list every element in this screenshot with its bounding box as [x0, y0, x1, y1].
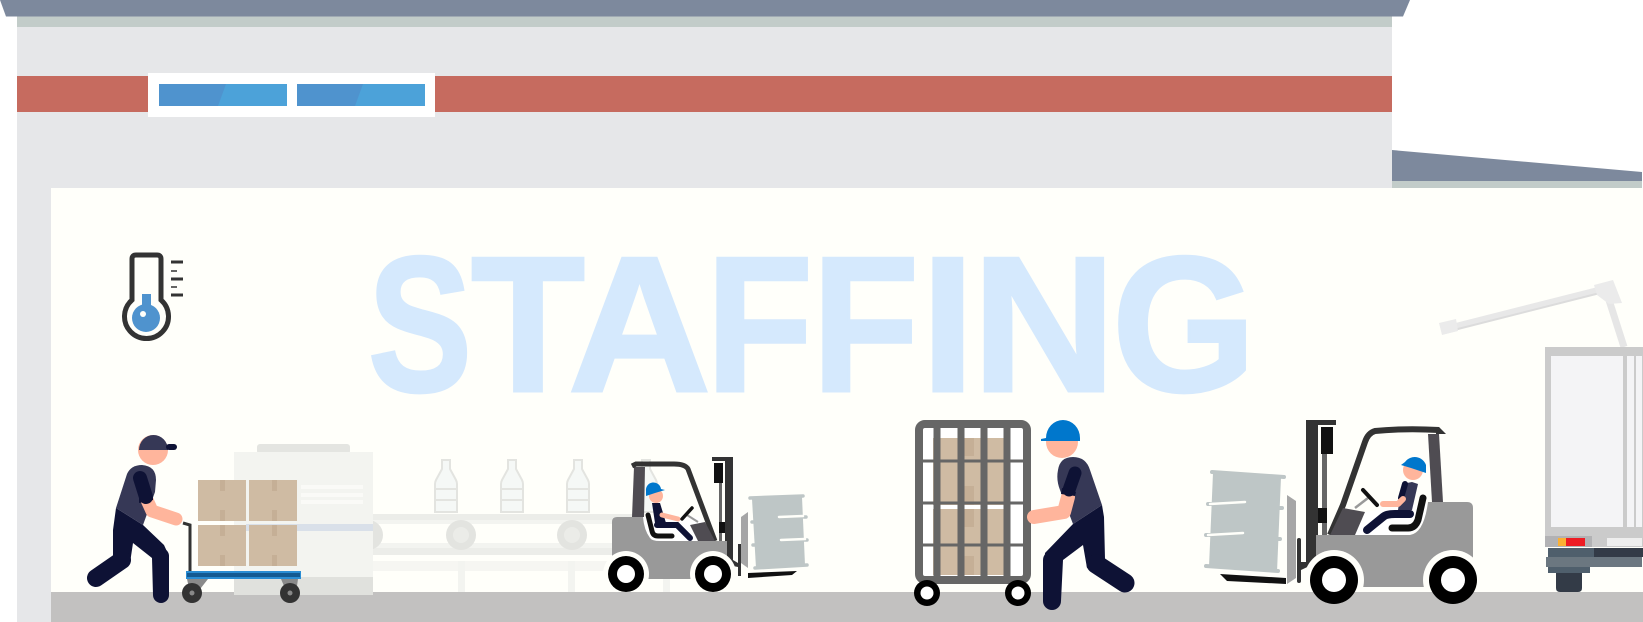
trailer [1545, 347, 1643, 536]
boxes [933, 438, 1004, 505]
title: I [921, 216, 975, 432]
interior background [51, 188, 1643, 592]
title: A [568, 216, 711, 432]
torso [116, 465, 156, 525]
cage interior [919, 424, 1027, 580]
floor [51, 592, 1643, 622]
conveyor with bottles [353, 460, 670, 592]
arm [147, 500, 176, 519]
mast [725, 457, 733, 563]
wheels [603, 551, 649, 597]
platform cart with boxes [182, 480, 301, 603]
forklift 2 [1206, 420, 1490, 612]
worker pushing cage [1034, 420, 1125, 601]
boxes [198, 480, 297, 566]
title: T [471, 216, 585, 432]
head [138, 435, 168, 465]
forklift 1 [600, 457, 807, 602]
tire [1556, 573, 1582, 592]
arm [1034, 497, 1068, 517]
body [1316, 502, 1473, 587]
roof and front pillar [1330, 429, 1439, 535]
sleeve [1069, 473, 1075, 490]
title: G [1112, 216, 1256, 432]
seat [1392, 498, 1423, 528]
legs [96, 508, 169, 595]
hard hat [1041, 420, 1080, 441]
filling machine [234, 444, 373, 595]
carriage and fork [1287, 495, 1296, 584]
roll cage with boxes [914, 424, 1031, 606]
title: F [812, 216, 919, 432]
rear post [1428, 434, 1443, 502]
title: N [972, 216, 1116, 432]
main roof [0, 0, 1410, 16]
icon: thermometer [125, 255, 183, 339]
body [612, 517, 727, 579]
cab interior [1355, 502, 1432, 535]
cab interior [643, 517, 715, 541]
cage frame [919, 424, 1027, 580]
dock arm [1439, 280, 1624, 347]
sleeve [140, 478, 146, 497]
roof and front pillar [632, 464, 715, 541]
roof fascia [17, 16, 1392, 27]
driver [646, 482, 690, 538]
legs [1043, 505, 1105, 601]
truck [1545, 347, 1643, 592]
side roof fascia [1392, 181, 1642, 188]
red band [17, 76, 1392, 112]
load [1206, 472, 1284, 572]
carriage and fork [741, 512, 748, 568]
worker pushing cart [96, 435, 177, 595]
cap [139, 435, 168, 450]
rear bumper panel [1545, 536, 1592, 547]
chassis [1548, 548, 1594, 557]
title: F [706, 216, 813, 432]
side roof [1392, 150, 1642, 181]
bottles [435, 460, 657, 512]
rear post [632, 467, 645, 517]
wheels [914, 580, 940, 606]
dashboard [690, 522, 715, 541]
driver [1367, 457, 1426, 530]
mast [1306, 420, 1318, 562]
window [148, 73, 435, 117]
torso [1057, 457, 1102, 524]
title: S [368, 216, 472, 432]
casters [187, 579, 298, 593]
load [750, 496, 807, 568]
dashboard [1330, 508, 1365, 535]
tail lights [1558, 538, 1566, 546]
head [1046, 426, 1078, 458]
handle [183, 523, 190, 571]
wheels [1304, 550, 1364, 610]
deck [186, 571, 301, 579]
